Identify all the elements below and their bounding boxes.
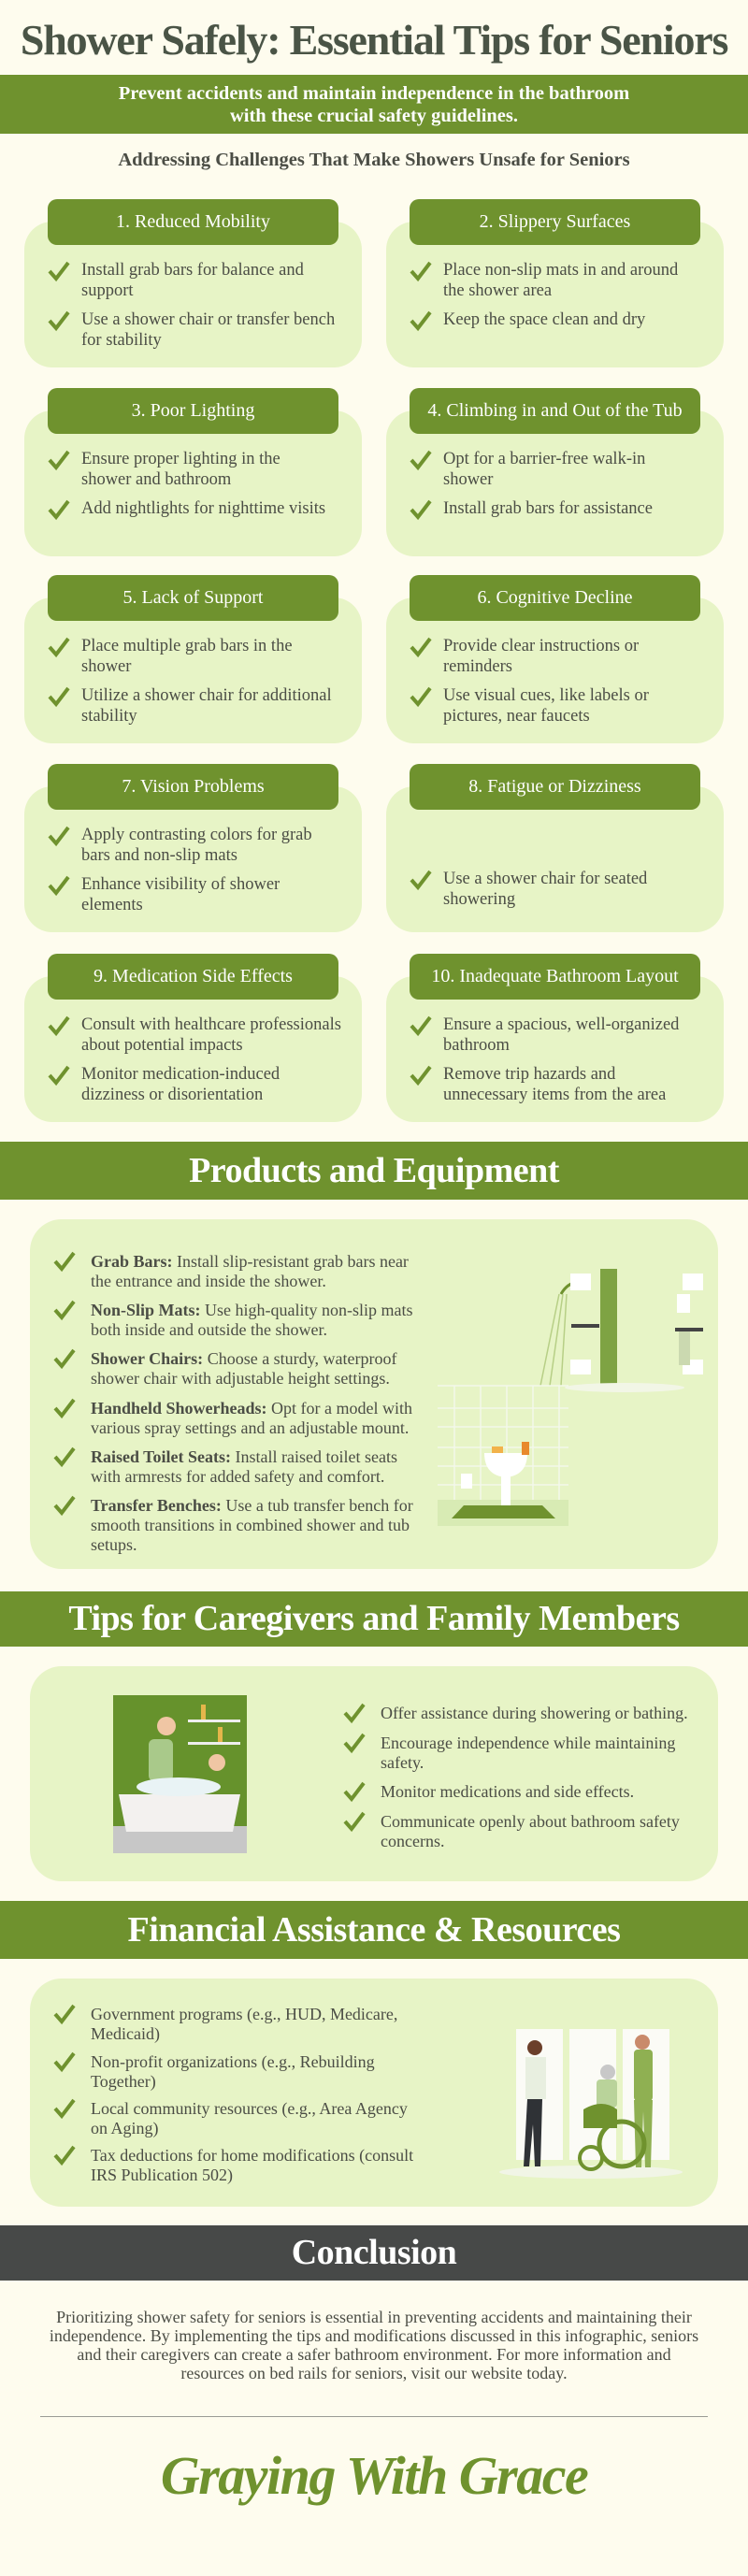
card 9 items: Consult with healthcare professionals [81, 1015, 341, 1034]
card 10 [386, 954, 724, 1122]
card 3 items: shower and bathroom [81, 470, 231, 489]
panel: financial: Local community resources (e.g., Area Agency [91, 2099, 408, 2118]
card 10 items: bathroom [443, 1036, 510, 1055]
panel: financial: Together) [91, 2072, 156, 2091]
card 6 header: 6. Cognitive Decline [477, 587, 633, 608]
conclusion text: and their caregivers can create a safer bathroom environment. For more information and [77, 2345, 671, 2364]
panel: products: smooth transitions in combined shower and tub [91, 1516, 410, 1534]
panel: caregivers: safety. [381, 1753, 424, 1772]
card 2 header: 2. Slippery Surfaces [480, 211, 630, 232]
card 9: Monitor medication-induced [81, 1065, 280, 1084]
card 7: elements [81, 896, 143, 914]
panel: financial [30, 1979, 718, 2207]
card 10 header [410, 954, 700, 1000]
card 3 [24, 388, 362, 556]
card 6 items [410, 637, 639, 676]
card 7 items: Apply contrasting colors for grab [81, 826, 312, 844]
intro banner: with these crucial safety guidelines. [230, 106, 518, 126]
conclusion banner: Conclusion [292, 2233, 456, 2272]
card 10: unnecessary items from the area [443, 1086, 666, 1104]
card 5 [24, 575, 362, 743]
illustration: shower and sink [438, 1269, 703, 1526]
card 7 items: bars and non-slip mats [81, 846, 237, 865]
card 3: Add nightlights for nighttime visits [81, 499, 325, 518]
card 9 items: about potential impacts [81, 1036, 243, 1055]
panel: caregivers: concerns. [381, 1832, 444, 1850]
card 9 [24, 954, 362, 1122]
card 10 header: 10. Inadequate Bathroom Layout [431, 966, 679, 986]
card 8 items [410, 870, 647, 909]
card 5: Utilize a shower chair for additional [81, 686, 332, 705]
conclusion text [50, 2308, 698, 2382]
illustration: doctor, wheelchair, caregiver [499, 2029, 683, 2179]
card 8 items: showering [443, 890, 515, 909]
card 1: for stability [81, 331, 162, 350]
card 2 items: Place non-slip mats in and around [443, 261, 678, 280]
card 1 header: 1. Reduced Mobility [116, 211, 270, 232]
conclusion text: resources on bed rails for seniors, visit our website today. [180, 2364, 568, 2382]
card 2 items [410, 261, 679, 300]
panel: financial: Tax deductions for home modifications (consult [91, 2146, 413, 2165]
card 2 [386, 199, 724, 367]
card 8 header: 8. Fatigue or Dizziness [468, 776, 641, 797]
card 8 header [410, 764, 700, 810]
panel: products: Non-Slip Mats: Use high-quality non-slip mats [91, 1301, 413, 1319]
panel: caregivers [30, 1666, 718, 1881]
financial items [54, 2005, 397, 2043]
panel: products [30, 1219, 718, 1569]
card 2 items: the shower area [443, 281, 552, 300]
intro banner: Prevent accidents and maintain independence in the bathroom [119, 83, 629, 104]
card 10 items [410, 1015, 679, 1055]
card 10 items: Ensure a spacious, well-organized [443, 1015, 679, 1034]
card 3 header: 3. Poor Lighting [132, 400, 254, 421]
panel: products: both inside and outside the shower. [91, 1320, 327, 1339]
title: Shower Safely: Essential Tips for Seniors [21, 16, 727, 64]
card 6 items: Provide clear instructions or [443, 637, 639, 655]
panel: caregivers: Encourage independence while maintaining [381, 1734, 675, 1752]
products banner [0, 1142, 748, 1200]
card 1: Use a shower chair or transfer bench [81, 310, 335, 329]
card 2: Keep the space clean and dry [443, 310, 645, 329]
card 6: Use visual cues, like labels or [443, 686, 649, 705]
conclusion text: Prioritizing shower safety for seniors is essential in preventing accidents and maintaining their [56, 2308, 692, 2326]
panel: caregivers: Monitor medications and side effects. [381, 1782, 634, 1801]
card 3 items: Ensure proper lighting in the [81, 450, 280, 468]
card 4 items: shower [443, 470, 493, 489]
card 5: stability [81, 707, 137, 726]
card 10: Remove trip hazards and [443, 1065, 615, 1084]
card 3 items [49, 450, 280, 489]
subheading: Addressing Challenges That Make Showers Unsafe for Seniors [118, 150, 630, 170]
card 4 [386, 388, 724, 556]
panel: products: Shower Chairs: Choose a sturdy, waterproof [91, 1349, 396, 1368]
financial banner [0, 1901, 748, 1959]
card 9 items [49, 1015, 341, 1055]
card 5 items: shower [81, 657, 131, 676]
card 4 header: 4. Climbing in and Out of the Tub [427, 400, 683, 421]
conclusion banner [0, 2225, 748, 2281]
card 5 items: Place multiple grab bars in the [81, 637, 293, 655]
panel: products: with armrests for added safety and comfort. [91, 1467, 384, 1486]
card 7 header [48, 764, 338, 810]
intro banner [0, 75, 748, 134]
financial items: Medicaid) [91, 2024, 160, 2043]
card 6 [386, 575, 724, 743]
card 1 items [49, 261, 304, 300]
card 4 header [410, 388, 700, 434]
logo: Graying With Grace [161, 2445, 587, 2506]
card 9 header: 9. Medication Side Effects [94, 966, 293, 986]
card 4: Install grab bars for assistance [443, 499, 653, 518]
panel: products: Handheld Showerheads: Opt for a model with [91, 1399, 412, 1418]
panel: financial: on Aging) [91, 2119, 159, 2137]
caregivers banner: Tips for Caregivers and Family Members [68, 1599, 680, 1638]
caregiver items: Offer assistance during showering or bathing. [381, 1704, 688, 1722]
financial items: Government programs (e.g., HUD, Medicare, [91, 2005, 397, 2023]
products banner: Products and Equipment [189, 1151, 559, 1190]
card 1 items: Install grab bars for balance and [81, 261, 304, 280]
card 5 header [48, 575, 338, 621]
caregivers banner [0, 1591, 748, 1647]
conclusion text: independence. By implementing the tips and modifications discussed in this infographic, seniors [50, 2326, 698, 2345]
panel: financial: IRS Publication 502) [91, 2166, 233, 2184]
card 1 items: support [81, 281, 133, 300]
card 7 header: 7. Vision Problems [122, 776, 265, 797]
card 7: Enhance visibility of shower [81, 875, 280, 894]
product items: the entrance and inside the shower. [91, 1272, 326, 1290]
card 9 header [48, 954, 338, 1000]
card 6 items: reminders [443, 657, 512, 676]
panel: caregivers: Communicate openly about bathroom safety [381, 1812, 680, 1831]
panel: products: Raised Toilet Seats: Install raised toilet seats [91, 1447, 397, 1466]
card 5 items [49, 637, 293, 676]
card 9: dizziness or disorientation [81, 1086, 263, 1104]
card 6 header [410, 575, 700, 621]
card 6: pictures, near faucets [443, 707, 590, 726]
card 4 items: Opt for a barrier-free walk-in [443, 450, 645, 468]
panel: products: shower chair with adjustable height settings. [91, 1369, 390, 1388]
card 5 header: 5. Lack of Support [123, 587, 263, 608]
card 1 [24, 199, 362, 367]
financial banner: Financial Assistance & Resources [128, 1910, 620, 1950]
card 4 items [410, 450, 645, 489]
panel: products: setups. [91, 1535, 137, 1554]
panel: products: various spray settings and an adjustable mount. [91, 1418, 409, 1437]
panel: financial: Non-profit organizations (e.g., Rebuilding [91, 2052, 375, 2071]
card 1 header [48, 199, 338, 245]
card 7 [24, 764, 362, 932]
card 7 items [49, 826, 312, 865]
card 8 items: Use a shower chair for seated [443, 870, 647, 888]
card 8 [386, 764, 724, 932]
product items [54, 1251, 409, 1290]
card 2 header [410, 199, 700, 245]
illustration: caregiver bathing senior [113, 1695, 247, 1853]
product items: Grab Bars: Install slip-resistant grab bars near [91, 1252, 409, 1271]
card 3 header [48, 388, 338, 434]
panel: products: Transfer Benches: Use a tub transfer bench for [91, 1496, 413, 1515]
